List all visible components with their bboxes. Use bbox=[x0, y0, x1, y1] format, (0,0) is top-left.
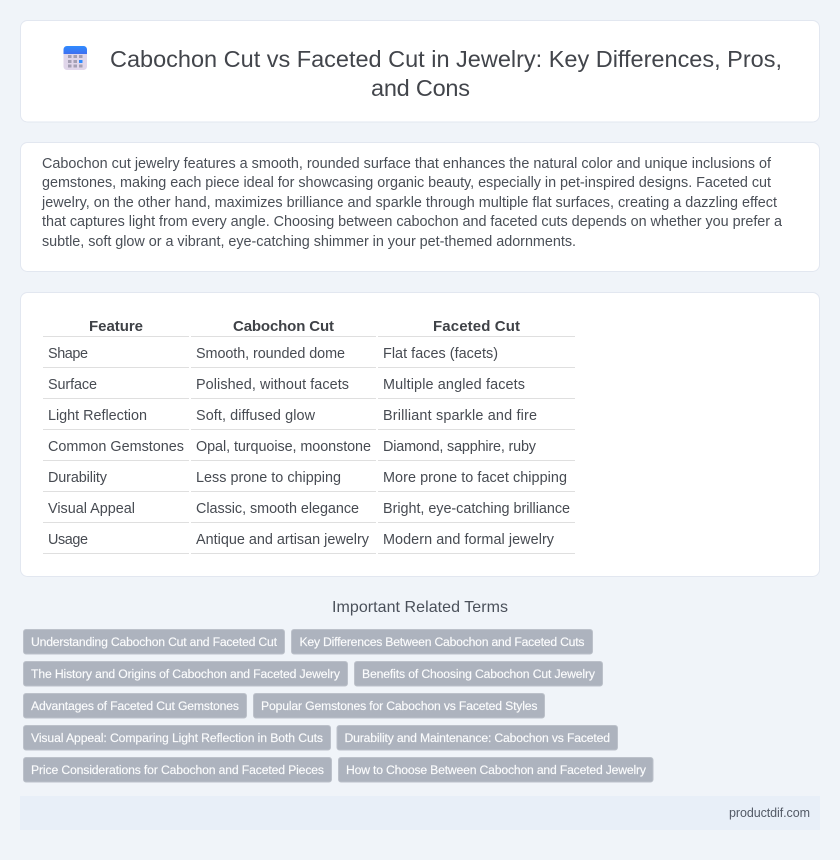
table row: surface: Polished, without facets bbox=[196, 377, 349, 393]
text block: introduction paragraph: Cabochon cut jewelry features a smooth, rounded surface that enhances the natural color and unique inclusions of bbox=[42, 156, 772, 172]
table row: light reflection bbox=[48, 408, 537, 424]
tag bbox=[254, 694, 544, 718]
table row: usage bbox=[48, 532, 555, 548]
tag bbox=[24, 694, 246, 718]
table header: Cabochon Cut bbox=[233, 318, 334, 335]
table row: shape: Flat faces (facets) bbox=[383, 346, 498, 362]
table row: durability: Durability bbox=[48, 470, 108, 486]
table row: common gemstones: Diamond, sapphire, ruby bbox=[383, 439, 537, 455]
table row: durability: More prone to facet chipping bbox=[383, 470, 567, 486]
table header bbox=[89, 318, 520, 335]
icon: calendar bbox=[64, 46, 87, 70]
footer bbox=[20, 796, 820, 830]
table row: light reflection: Soft, diffused glow bbox=[196, 408, 316, 424]
tag: How to Choose Between Cabochon and Faceted Jewelry bbox=[346, 763, 647, 777]
text block: introduction paragraph: jewelry, on the other hand, maximizes brilliance and sparkle through multiple flat surfaces, creating a dazzling effect bbox=[41, 195, 777, 211]
tag bbox=[24, 662, 348, 686]
table row: common gemstones bbox=[48, 439, 537, 455]
table row: common gemstones: Common Gemstones bbox=[48, 439, 184, 455]
table row: visual appeal: Classic, smooth elegance bbox=[196, 501, 359, 517]
table row: durability: Less prone to chipping bbox=[196, 470, 341, 486]
heading: important related terms: Important Related Terms bbox=[332, 599, 508, 616]
tag: Benefits of Choosing Cabochon Cut Jewelry bbox=[362, 667, 596, 681]
tag bbox=[354, 662, 602, 686]
table row: shape: Shape bbox=[48, 346, 88, 362]
footer source: productdif.com bbox=[729, 806, 810, 820]
text block: introduction paragraph: gemstones, making each piece ideal for showcasing organic beauty, especially in pet-inspired designs. Faceted cut bbox=[42, 175, 771, 191]
tag: Popular Gemstones for Cabochon vs Faceted Styles bbox=[261, 699, 538, 713]
table row: surface bbox=[48, 377, 525, 393]
table row: surface: Multiple angled facets bbox=[383, 377, 525, 393]
table row: visual appeal: Visual Appeal bbox=[48, 501, 135, 517]
table row: durability bbox=[48, 470, 567, 486]
tag bbox=[24, 726, 330, 750]
table row: light reflection: Brilliant sparkle and fire bbox=[383, 408, 537, 424]
table row: usage: Modern and formal jewelry bbox=[383, 532, 555, 548]
tag bbox=[338, 758, 653, 782]
table row: visual appeal: Bright, eye-catching brilliance bbox=[383, 501, 570, 517]
tag: The History and Origins of Cabochon and Faceted Jewelry bbox=[31, 667, 341, 681]
title bbox=[110, 46, 782, 101]
tag: Price Considerations for Cabochon and Faceted Pieces bbox=[31, 763, 324, 777]
tag bbox=[24, 758, 332, 782]
tag: Understanding Cabochon Cut and Faceted Cut bbox=[31, 635, 278, 649]
panel: introduction bbox=[20, 142, 820, 272]
tag: Advantages of Faceted Cut Gemstones bbox=[31, 699, 239, 713]
panel: related term tags bbox=[24, 630, 653, 782]
tag: Durability and Maintenance: Cabochon vs Faceted bbox=[344, 731, 610, 745]
panel: header bbox=[20, 20, 820, 122]
table row: shape: Smooth, rounded dome bbox=[196, 346, 345, 362]
text block: introduction paragraph: that captures light from every angle. Choosing between cabochon and faceted cuts depends on whether you prefer a bbox=[42, 214, 782, 230]
title: Cabochon Cut vs Faceted Cut in Jewelry: Key Differences, Pros, bbox=[110, 46, 782, 72]
tag bbox=[24, 630, 284, 654]
table row: common gemstones: Opal, turquoise, moonstone bbox=[196, 439, 371, 455]
table row: shape bbox=[48, 346, 498, 362]
table header: Faceted Cut bbox=[433, 318, 520, 335]
table row: light reflection: Light Reflection bbox=[48, 408, 147, 424]
tag bbox=[337, 726, 618, 750]
table row: surface: Surface bbox=[48, 377, 97, 393]
tag: Visual Appeal: Comparing Light Reflection in Both Cuts bbox=[31, 731, 323, 745]
table row: usage: Usage bbox=[48, 532, 88, 548]
title: and Cons bbox=[371, 75, 470, 101]
tag bbox=[292, 630, 592, 654]
text block: introduction paragraph bbox=[41, 156, 782, 250]
table row: visual appeal bbox=[48, 501, 570, 517]
tag: Key Differences Between Cabochon and Faceted Cuts bbox=[300, 635, 584, 649]
table header: Feature bbox=[89, 318, 143, 335]
panel: comparison table bbox=[20, 292, 820, 576]
table row: usage: Antique and artisan jewelry bbox=[196, 532, 370, 548]
text block: introduction paragraph: subtle, soft glow or a vibrant, eye-catching shimmer in your pet-themed adornments. bbox=[42, 234, 576, 250]
